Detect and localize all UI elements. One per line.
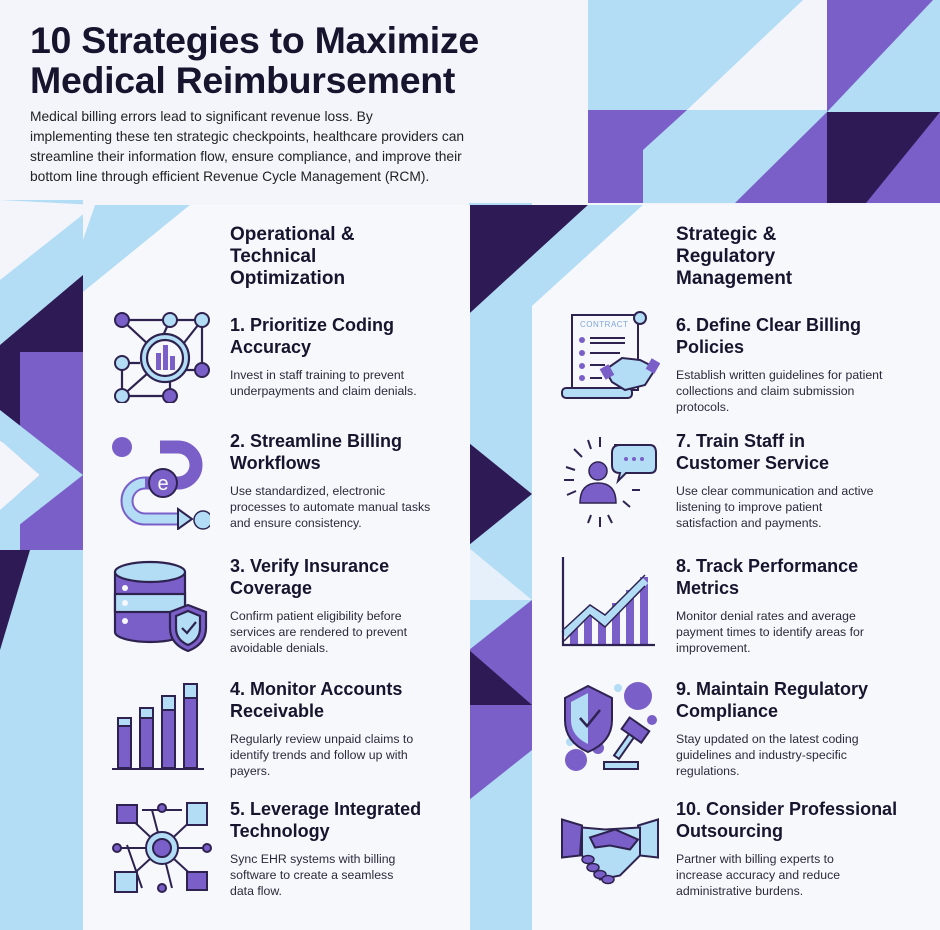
title: 10 Strategies to Maximize [30,19,479,61]
item 8 [676,556,864,655]
item 1: Invest in staff training to prevent [230,368,404,382]
icon: person speech [564,437,657,527]
item 10 [676,799,897,898]
item 9: 9. Maintain Regulatory [676,679,868,699]
item 2: Use standardized, electronic [230,484,385,498]
item 9 [676,679,868,778]
icon: e-workflow: e [157,473,169,495]
item 2: 2. Streamline Billing [230,431,402,451]
item 5: 5. Leverage Integrated [230,799,421,819]
intro text: Medical billing errors lead to significant revenue loss. By [30,109,373,124]
item 6: Establish written guidelines for patient [676,368,882,382]
title: Medical Reimbursement [30,59,455,101]
icon: shield gavel [564,682,657,771]
item 1 [230,315,417,398]
item 10: Partner with billing experts to [676,852,834,866]
heading: operational: Operational & [230,224,355,245]
item 4: payers. [230,764,270,778]
item 7: Use clear communication and active [676,484,874,498]
item 5 [230,799,421,898]
item 5: Technology [230,821,330,841]
icon: trend chart [561,557,655,646]
item 10: 10. Consider Professional [676,799,897,819]
item 4: Receivable [230,701,324,721]
item 8: 8. Track Performance [676,556,858,576]
icon: network chart [114,312,210,403]
item 6: collections and claim submission [676,384,854,398]
heading: strategic: Management [676,268,792,289]
heading: operational [230,224,355,289]
item 3: Coverage [230,578,312,598]
icon: integrated tech [112,802,212,893]
intro text: streamline their information flow, ensure compliance, and improve their [30,149,462,164]
icon: bar chart [112,683,204,770]
item 4 [230,679,413,778]
item 1: 1. Prioritize Coding [230,315,394,335]
item 8: Monitor denial rates and average [676,609,856,623]
item 4: identify trends and follow up with [230,748,408,762]
item 5: software to create a seamless [230,868,393,882]
item 2: Workflows [230,453,321,473]
item 4: Regularly review unpaid claims to [230,732,413,746]
item 7: listening to improve patient [676,500,822,514]
item 7: 7. Train Staff in [676,431,805,451]
item 3: avoidable denials. [230,641,328,655]
item 2 [230,431,430,530]
item 8: payment times to identify areas for [676,625,864,639]
item 5: Sync EHR systems with billing [230,852,395,866]
item 8: Metrics [676,578,739,598]
heading: operational: Optimization [230,268,345,289]
heading: strategic: Regulatory [676,246,775,267]
item 6: 6. Define Clear Billing [676,315,861,335]
item 3 [230,556,407,655]
item 8: improvement. [676,641,750,655]
item 6: Policies [676,337,744,357]
item 10: increase accuracy and reduce [676,868,840,882]
icon: contract handshake: CONTRACT [580,320,628,329]
item 7: satisfaction and payments. [676,516,822,530]
icon: handshake [561,818,659,884]
intro text: implementing these ten strategic checkpoints, healthcare providers can [30,129,464,144]
icon: contract handshake [561,311,660,399]
heading: operational: Technical [230,246,316,267]
intro text: bottom line through efficient Revenue Cycle Management (RCM). [30,169,429,184]
item 9: regulations. [676,764,740,778]
item 6 [676,315,882,414]
heading: strategic [676,224,792,289]
item 10: Outsourcing [676,821,783,841]
item 3: 3. Verify Insurance [230,556,389,576]
intro text [30,109,464,184]
item 2: and ensure consistency. [230,516,362,530]
heading: strategic: Strategic & [676,224,776,245]
item 1: underpayments and claim denials. [230,384,417,398]
item 9: guidelines and industry-specific [676,748,847,762]
icon: e-workflow [112,437,210,530]
item 9: Stay updated on the latest coding [676,732,859,746]
item 2: processes to automate manual tasks [230,500,430,514]
item 4: 4. Monitor Accounts [230,679,402,699]
item 9: Compliance [676,701,778,721]
item 10: administrative burdens. [676,884,803,898]
item 3: Confirm patient eligibility before [230,609,402,623]
icon: database shield [114,560,208,652]
item 3: services are rendered to prevent [230,625,407,639]
title [30,19,479,101]
item 1: Accuracy [230,337,311,357]
item 7 [676,431,874,530]
item 6: protocols. [676,400,729,414]
item 7: Customer Service [676,453,829,473]
item 5: data flow. [230,884,282,898]
